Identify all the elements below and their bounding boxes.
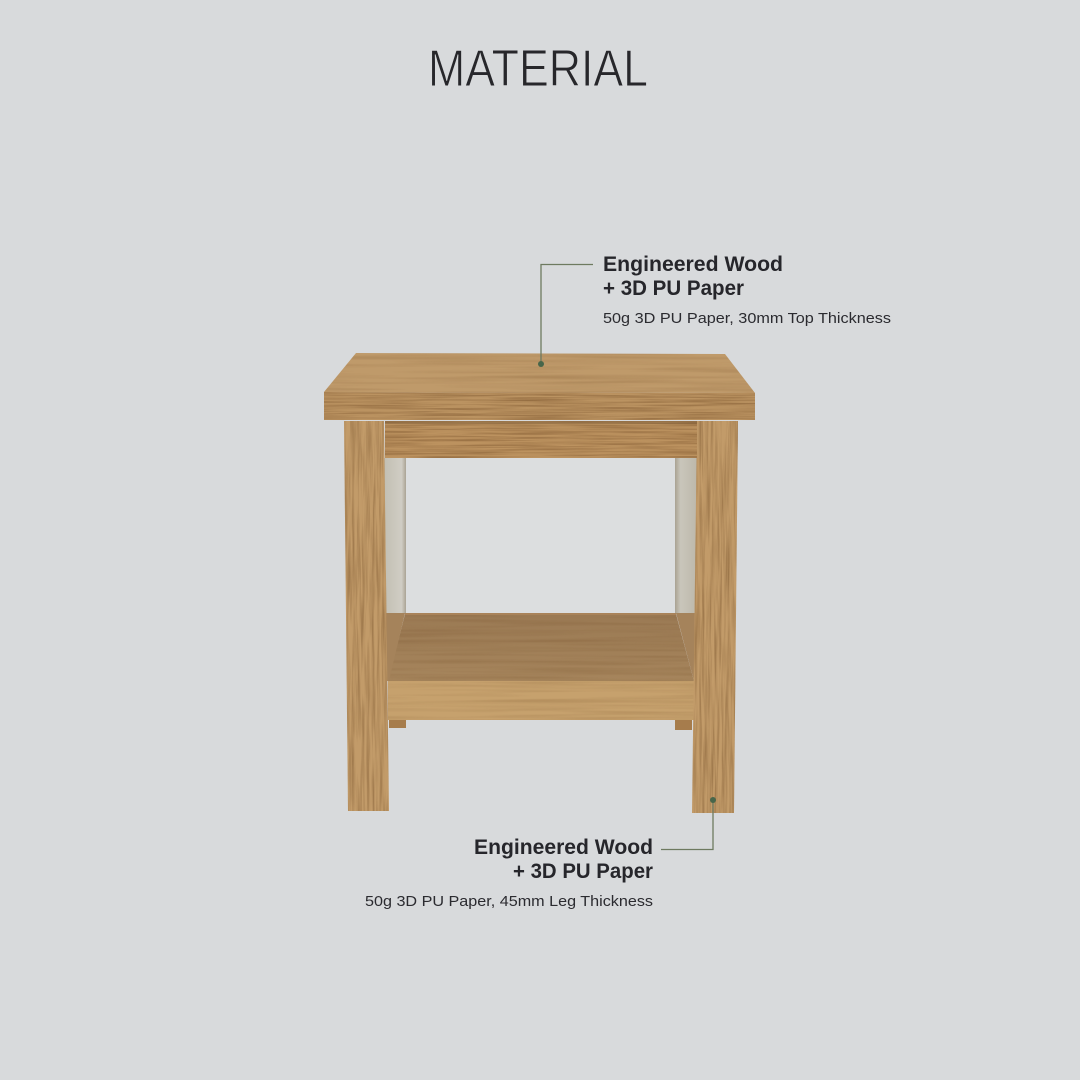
marker dot xyxy=(538,361,544,367)
callout heading xyxy=(603,253,783,300)
shelf back edge xyxy=(405,613,676,615)
lower shelf surface xyxy=(388,614,694,681)
marker dot xyxy=(710,797,716,803)
callout: leg material xyxy=(365,797,716,910)
upper apron xyxy=(385,421,697,458)
callout heading: Engineered Wood xyxy=(603,253,783,276)
callout detail: 50g 3D PU Paper, 45mm Leg Thickness xyxy=(365,893,653,910)
title: MATERIAL xyxy=(428,40,648,98)
callout detail: 50g 3D PU Paper, 30mm Top Thickness xyxy=(603,310,891,327)
opening behind the table xyxy=(405,458,676,614)
back feet xyxy=(389,719,692,730)
side table product image xyxy=(324,353,755,813)
callout: top material xyxy=(538,253,891,367)
callout heading: + 3D PU Paper xyxy=(603,277,744,300)
apron shadow xyxy=(385,421,697,424)
table top surface xyxy=(324,353,755,393)
back right leg xyxy=(675,458,697,614)
callout heading xyxy=(474,836,653,883)
back left leg xyxy=(384,458,406,614)
callout heading: Engineered Wood xyxy=(474,836,653,859)
right front leg xyxy=(692,421,738,813)
leader line xyxy=(661,800,713,850)
table top front edge xyxy=(324,392,755,420)
shelf side shadows xyxy=(386,613,696,681)
left front leg xyxy=(344,421,389,811)
leader line xyxy=(541,264,593,364)
callout heading: + 3D PU Paper xyxy=(513,860,653,883)
lower shelf front rail xyxy=(388,681,694,720)
